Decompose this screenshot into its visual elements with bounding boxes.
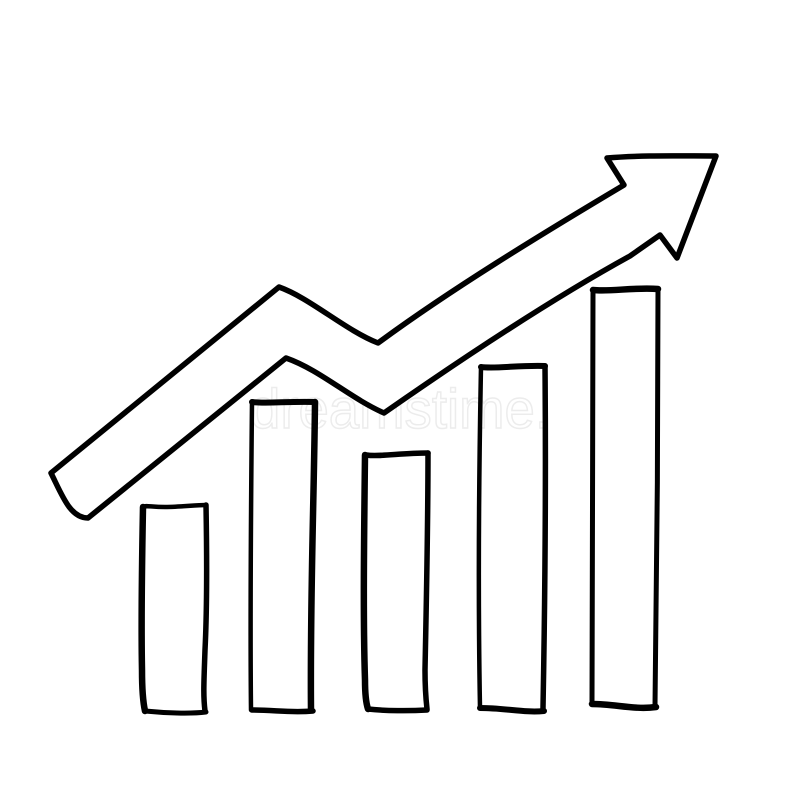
arrow: upward zigzag trend xyxy=(51,156,716,518)
bar 3 xyxy=(364,453,428,711)
bar chart xyxy=(142,289,658,713)
watermark: dreamstime. xyxy=(250,377,550,440)
bar 4 xyxy=(479,366,545,711)
bar 5 xyxy=(592,289,658,708)
bar 1 xyxy=(142,505,207,713)
bar 2 xyxy=(251,402,315,712)
